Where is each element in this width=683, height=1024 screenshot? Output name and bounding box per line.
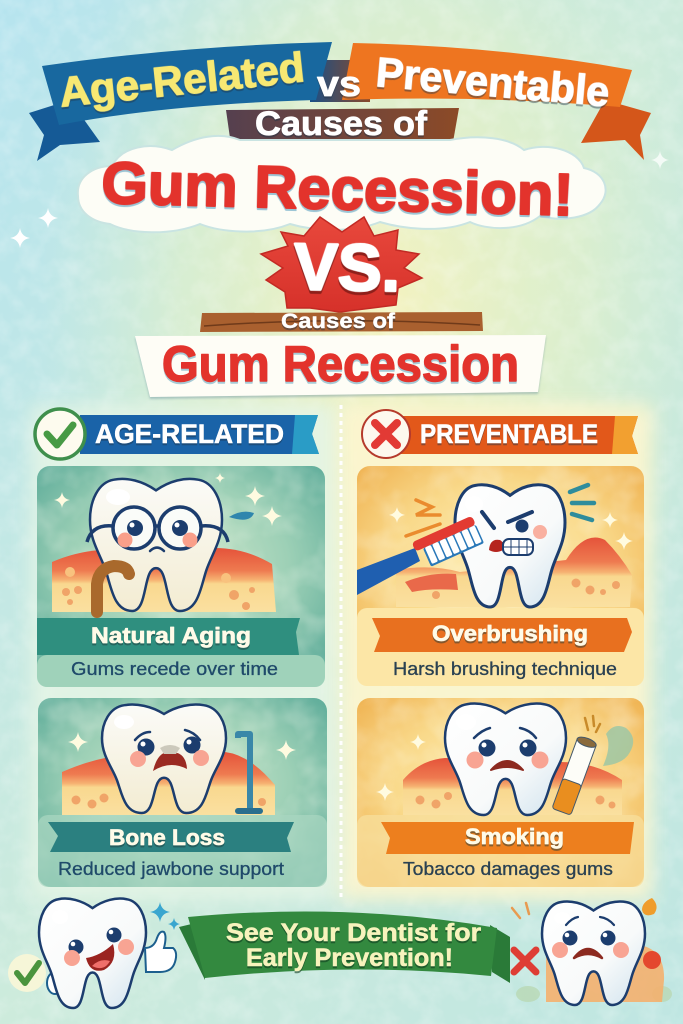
blue ribbon tail (29, 100, 100, 161)
banner body (188, 912, 497, 978)
motion lines (389, 485, 633, 550)
blue sparkles (150, 902, 180, 930)
description: Reduced jawbone support (58, 859, 284, 879)
name: Overbrushing (432, 621, 588, 646)
smoke (603, 726, 633, 766)
name banner (48, 822, 294, 852)
check badge (8, 954, 46, 992)
face (64, 928, 134, 971)
heading: Age-Related: Age-Related (57, 43, 307, 116)
tooth: sad (445, 704, 566, 815)
alert marks (512, 898, 657, 918)
burst star (261, 217, 422, 312)
label: AGE-RELATED (95, 419, 284, 449)
header: preventable (362, 410, 638, 458)
heading: vs: vs (317, 63, 361, 104)
banner shape (135, 335, 546, 397)
gums (403, 758, 622, 815)
tooth: angry (455, 485, 565, 607)
orange ribbon (342, 43, 632, 107)
header: age-related (35, 409, 319, 459)
gums (52, 548, 276, 612)
face (552, 917, 629, 958)
sparkles (376, 734, 426, 801)
tooth: old with glasses (87, 479, 228, 611)
dental probe (238, 734, 260, 811)
gum block (546, 945, 664, 1002)
description: Harsh brushing technique (393, 659, 617, 679)
banner text: See Your Dentist for (226, 919, 481, 947)
panel: bone loss (38, 698, 327, 887)
name: Bone Loss (109, 825, 225, 850)
panel: smoking (357, 698, 644, 887)
label: PREVENTABLE (420, 419, 598, 449)
arm (47, 972, 63, 994)
heading: Gum Recession!: Gum Recession! (101, 150, 574, 228)
sparkles and drops (54, 473, 282, 526)
VS burst (261, 217, 422, 312)
sparkles (68, 732, 296, 760)
embers (585, 716, 600, 732)
panel background (38, 698, 327, 887)
orange ribbon tail (581, 100, 651, 160)
panel: overbrushing (357, 466, 644, 686)
description: Gums recede over time (71, 659, 278, 679)
panel background (357, 466, 644, 686)
name: Smoking (465, 824, 564, 849)
name: Natural Aging (91, 623, 251, 648)
red x (514, 950, 536, 972)
tooth body (542, 901, 645, 1005)
centre strip (310, 60, 370, 102)
cigarette (552, 735, 597, 815)
banner text (226, 919, 481, 972)
plank text: Causes of (281, 310, 396, 333)
banner text: Early Prevention! (246, 944, 453, 972)
blue ribbon (42, 42, 332, 125)
subtitle white banner: gum recession (135, 335, 546, 397)
tooth: sad cracked (102, 705, 226, 813)
toothbrush (357, 516, 484, 595)
smoke puffs (516, 986, 672, 1002)
gums (62, 752, 275, 815)
thumbs up (145, 932, 176, 972)
name banner (37, 618, 300, 655)
subtitle plank: causes of (200, 310, 483, 333)
banner text: Gum Recession (162, 336, 519, 392)
cloud shape (78, 136, 606, 232)
ribbon (400, 416, 638, 454)
title banner: age-related vs preventable (29, 42, 651, 161)
tooth body (39, 899, 146, 1008)
description: Tobacco damages gums (403, 859, 613, 879)
ribbon (80, 415, 319, 454)
VS text: VS. (293, 229, 401, 305)
plank (200, 312, 483, 332)
heading: Preventable: Preventable (374, 48, 611, 115)
footer: worried tooth (512, 898, 672, 1005)
banner tails (179, 922, 205, 980)
check badge (35, 409, 85, 459)
panel: natural aging (37, 466, 325, 687)
cane (97, 566, 129, 612)
heading: Causes of: Causes of (255, 105, 428, 143)
name banner (381, 822, 634, 854)
gums (396, 538, 632, 607)
panel background (37, 466, 325, 687)
panel background (357, 698, 644, 887)
footer: happy tooth (8, 899, 180, 1008)
name banner (372, 618, 632, 652)
x badge (362, 410, 410, 458)
brown ribbon (226, 108, 459, 145)
footer banner: see your dentist (179, 912, 510, 983)
cloud with main title (78, 136, 606, 232)
